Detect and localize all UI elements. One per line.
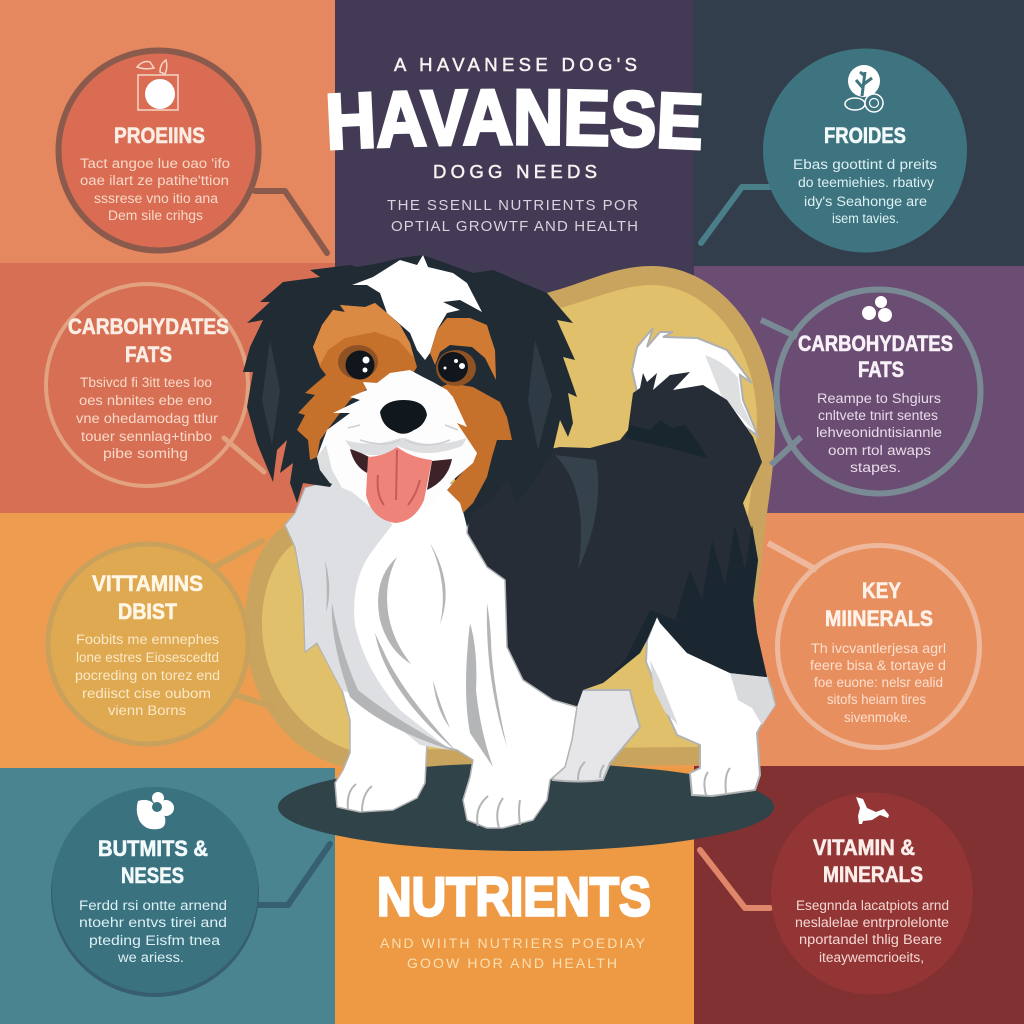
body text: foe euone: nelsr ealid (814, 675, 943, 690)
body text: we ariess. (117, 950, 184, 965)
panel: carbohydrates fats left (46, 284, 264, 486)
body text: neslalelae entrprolelonte (795, 915, 949, 930)
panel: vitamins (48, 541, 274, 744)
circle (58, 50, 258, 250)
body text: stapes. (850, 460, 901, 475)
back leg behind body (553, 690, 640, 782)
tagline: THE SSENLL NUTRIENTS POR (387, 197, 638, 214)
mouth (350, 449, 452, 490)
body text: feere bisa & tortaye d (810, 658, 946, 673)
kicker line: A HAVANESE DOG'S (394, 54, 637, 75)
heading (68, 314, 229, 367)
body text: Tact angoe lue oao 'ifo (80, 156, 230, 171)
heading: FROIDES (824, 123, 906, 148)
connector (259, 844, 330, 905)
body text (793, 157, 937, 226)
heading: FATS (125, 342, 172, 367)
backdrop blob behind dog (245, 266, 775, 767)
heading: CARBOHYDATES (798, 331, 953, 356)
circle (771, 792, 973, 994)
body text: oae ilart ze patihe'ttion (80, 173, 229, 188)
body text (795, 898, 949, 965)
body text: lone estres Eiosescedtd (76, 650, 219, 665)
heading: MINERALS (823, 862, 923, 887)
heading (98, 836, 208, 888)
grey neck and chest shading (286, 470, 450, 750)
fur strokes (325, 543, 507, 767)
lighter fur highlights (555, 455, 598, 570)
caption: AND WIITH NUTRIERS POEDIAY (380, 935, 646, 951)
heading: MIINERALS (825, 606, 933, 631)
body text: isem tavies. (832, 211, 899, 226)
lighter orange left (313, 303, 414, 365)
body text: Reampe to Shgiurs (817, 391, 941, 406)
white muzzle (317, 370, 477, 515)
body text: vne ohedamodag ttlur (76, 411, 219, 426)
connector (768, 543, 817, 570)
body text: sivenmoke. (844, 710, 911, 725)
panel: butmits (51, 787, 330, 997)
panel: vitamin and minerals (700, 792, 973, 994)
nose (380, 400, 427, 434)
body text: nportandel thlig Beare (799, 932, 942, 947)
whisker lines on muzzle (348, 425, 458, 445)
muzzle shadow (317, 438, 467, 488)
ear fur highlights (262, 340, 552, 450)
circle (776, 290, 980, 494)
tongue (366, 447, 432, 523)
bottom heading block (377, 866, 651, 971)
heading (798, 331, 953, 382)
caption: GOOW HOR AND HEALTH (407, 955, 617, 971)
heading: CARBOHYDATES (68, 314, 229, 339)
title block (328, 54, 702, 235)
black body and tail (467, 372, 767, 707)
orange fur left (297, 303, 417, 460)
body text: pibe somihg (103, 446, 188, 461)
heading: FATS (858, 357, 904, 382)
orange fur right top (430, 318, 496, 380)
icon: apple in box (137, 60, 178, 110)
front paw toes (348, 784, 520, 828)
white blaze (352, 255, 482, 360)
eyes (338, 345, 476, 386)
connector (701, 187, 770, 243)
body text: Ebas goottint d preits (793, 157, 937, 172)
body text: pteding Eisfm tnea (89, 933, 221, 948)
body text: Esegnnda lacatpiots arnd (796, 898, 949, 913)
connectors (761, 320, 801, 465)
body text (80, 156, 230, 223)
heading (92, 571, 203, 624)
heading: VITAMIN & (813, 835, 915, 860)
panel: key minerals (768, 543, 980, 748)
panel: froides (701, 48, 967, 252)
body text: rediisct cise oubom (82, 686, 211, 701)
icon: leaf and nuts (845, 65, 883, 112)
body text: Th ivcvantlerjesa agrl (811, 641, 946, 656)
nutrients title: NUTRIENTS (377, 866, 651, 928)
body text (75, 632, 220, 718)
body text: Foobits me emnephes (76, 632, 219, 647)
circle (46, 284, 248, 486)
body text: cnltvete tnirt sentes (818, 408, 938, 423)
heading: KEY (862, 578, 901, 603)
tagline (387, 197, 638, 235)
connector (224, 438, 264, 472)
connector (700, 850, 770, 908)
heading: BUTMITS & (98, 836, 208, 861)
body text (810, 641, 946, 725)
body text: Tbsivcd fi 3itt tees loo (80, 375, 212, 390)
body text (76, 375, 219, 461)
body text (816, 391, 942, 475)
platform (278, 763, 774, 851)
hind leg (646, 615, 775, 796)
body text (79, 898, 227, 965)
panel: carbohydrates fats right (761, 290, 980, 494)
body text: do teemiehies. rbativy (798, 175, 934, 190)
body text: oes nbnites ebe eno (79, 393, 212, 408)
hind paw toes (578, 762, 730, 795)
tagline: OPTIAL GROWTF AND HEALTH (391, 218, 638, 235)
hind leg shading (650, 660, 775, 725)
orange fur right cheek (427, 383, 512, 513)
subtitle: DOGG NEEDS (433, 161, 597, 182)
body text: ntoehr entvs tirei and (79, 915, 227, 930)
panel: proteins (58, 50, 327, 253)
icon: blob (137, 792, 174, 829)
heading (813, 835, 923, 887)
body text: pocreding on torez end (75, 668, 220, 683)
main title: HAVANESE (328, 88, 702, 150)
circle (48, 544, 248, 744)
icon: three dots (862, 296, 892, 322)
body text: iteaywemcrioeits, (819, 950, 924, 965)
head silhouette and ears (243, 255, 577, 527)
body text: Ferdd rsi ontte arnend (79, 898, 227, 913)
body text: Dem sile crihgs (108, 208, 203, 223)
body text: lehveonidntisiannle (816, 425, 942, 440)
circle (778, 546, 980, 748)
body text: touer sennlag+tinbo (81, 429, 212, 444)
icon: animal silhouette (856, 797, 889, 824)
caption (380, 935, 646, 971)
circle (51, 789, 259, 997)
tail fur tip (632, 328, 758, 436)
body text: oom rtol awaps (828, 443, 931, 458)
dark fur on lower body (603, 525, 767, 683)
heading: VITTAMINS (92, 571, 203, 596)
heading: PROEIINS (114, 123, 205, 148)
heading (825, 578, 933, 631)
body text: idy's Seahonge are (804, 194, 927, 209)
heading: NESES (121, 863, 184, 888)
heading: DBIST (118, 599, 178, 624)
circle (763, 48, 967, 252)
tail shadow (625, 420, 707, 458)
body text: sssrese vno itio ana (94, 191, 219, 206)
connector (255, 191, 327, 253)
body text: vienn Borns (108, 703, 186, 718)
tail grey shade (705, 355, 755, 432)
illustration: havanese dog (243, 255, 775, 851)
connectors (205, 541, 274, 707)
body text: sitofs heiarn tires (827, 692, 926, 707)
chest and front legs (285, 465, 577, 828)
